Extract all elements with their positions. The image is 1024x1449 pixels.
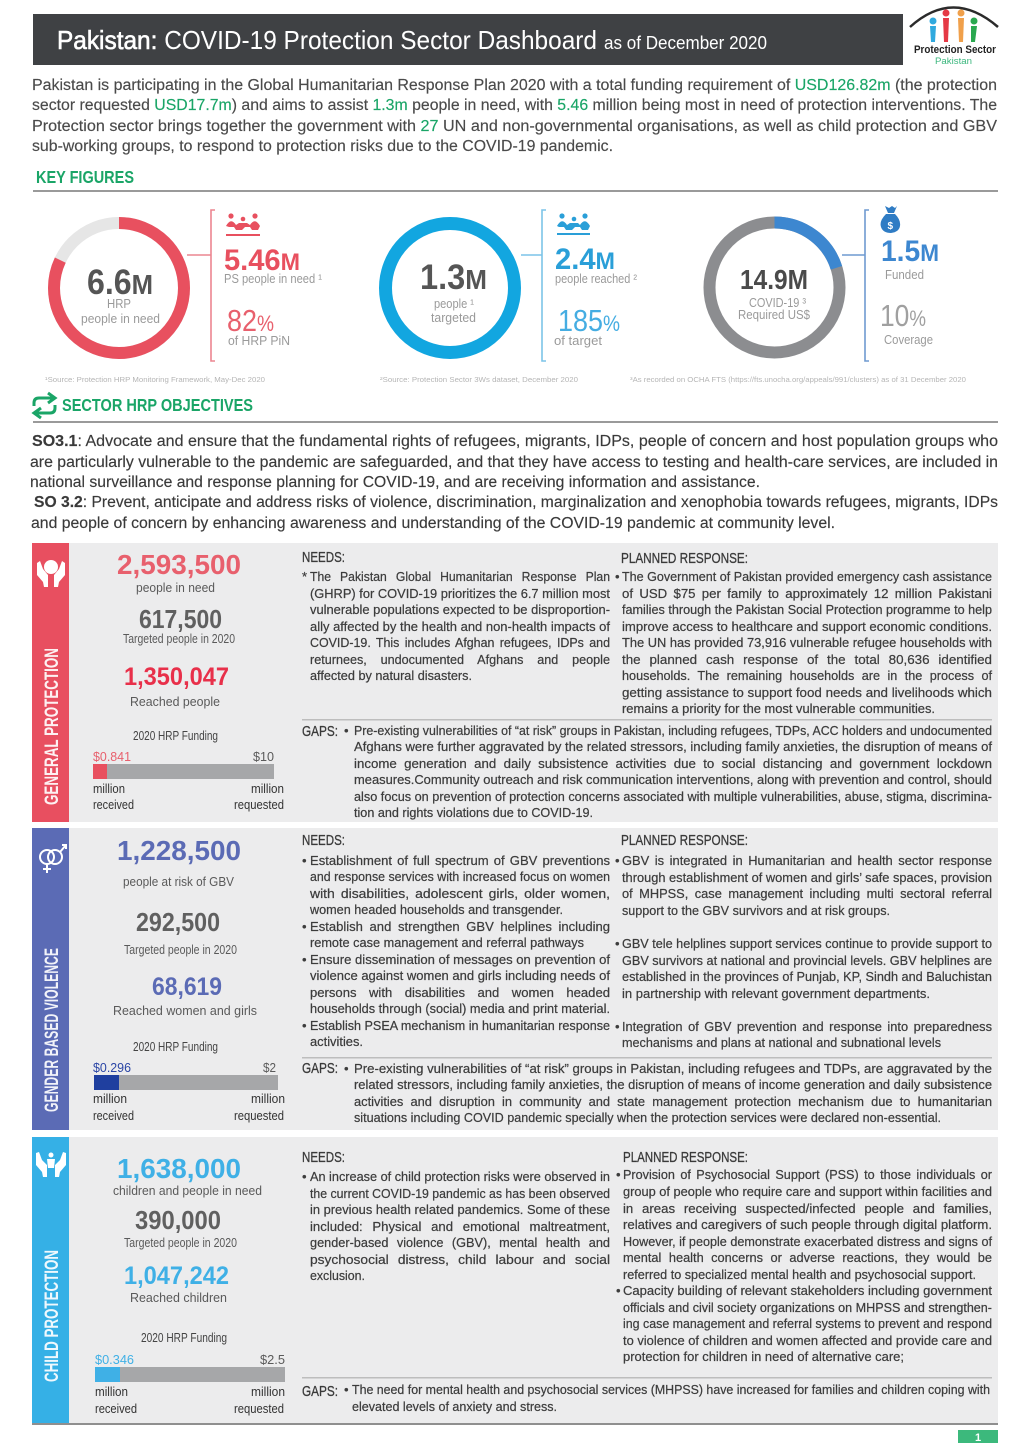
label: Funded — [885, 268, 924, 282]
gaps: The need for mental health and psychosocial services (MHPSS) have increased for families and children coping with — [352, 1382, 990, 1397]
icon: people — [557, 213, 590, 235]
needs: included: Physical and emotional maltreatment, — [310, 1219, 610, 1234]
planned response: GBV survivors at national and provincial levels. GBV helplines are — [622, 953, 992, 968]
gaps: • — [344, 1061, 349, 1076]
panel: gender based violence: people at risk of GBV — [123, 875, 235, 889]
donut: HRP people in need: HRP — [107, 297, 131, 311]
label: of target — [554, 334, 603, 348]
needs: Establishment of full spectrum of GBV preventions — [310, 853, 610, 868]
donut: people targeted: targeted — [431, 311, 476, 325]
planned response: ing case management and referral systems to prevent and respond — [623, 1316, 992, 1331]
funding bar: million — [251, 1385, 285, 1399]
needs: households through (social) media and print material. — [310, 1001, 610, 1016]
needs: • — [302, 853, 307, 868]
objectives text: SO 3.2: Prevent, anticipate and address risks of violence, discrimination, marginalization and xenophobia towards refugees, migrants, IDPs — [34, 494, 998, 511]
gaps: Pre-existing vulnerabilities of “at risk” groups in Pakistan, including refugees, TDPs, ACC holders and undocumented — [354, 723, 992, 738]
icon: money bag: $ — [888, 221, 894, 232]
needs: exclusion. — [310, 1268, 365, 1283]
stat: children in need: 1,638,000 — [117, 1153, 241, 1184]
planned response: • — [616, 1283, 621, 1298]
needs — [302, 549, 610, 683]
label: of HRP PiN — [228, 334, 290, 348]
objectives text: and people of concern by enhancing awareness and understanding of the COVID-19 pandemic at community level. — [31, 515, 835, 532]
sector title: GENERAL PROTECTION — [42, 648, 63, 805]
gaps: activities and disruption in community and state management protection mechanism due to humanitarian — [354, 1094, 992, 1109]
panel: general protection — [32, 543, 998, 822]
funding bar: million — [251, 782, 284, 796]
objectives text: are particularly vulnerable to the pandemic are safeguarded, and that they have access to testing and health-care services, are included in — [30, 454, 998, 471]
planned response: mental health concerns or adverse reactions, they would be — [623, 1250, 992, 1265]
planned response: The Government of Pakistan provided emergency cash assistance — [622, 569, 992, 584]
intro text: Protection sector brings together the government with 27 UN and non-governmental organisations, as well as child protection and GBV — [32, 118, 998, 135]
planned response — [616, 1149, 993, 1364]
planned response: referred to specialized mental health and psychosocial support. — [623, 1267, 976, 1282]
planned response: • — [615, 936, 620, 951]
funding bar — [93, 1040, 285, 1123]
panel: gender based violence: Targeted people in 2020 — [124, 943, 237, 957]
needs: The Pakistan Global Humanitarian Response Plan — [310, 569, 610, 584]
needs: ally affected by the health and non-health impacts of — [310, 619, 610, 634]
needs: women headed households and transgender. — [309, 902, 563, 917]
intro text: sector requested USD17.7m) and aims to assist 1.3m people in need, with 5.46 million being most in need of protection interventions. The — [32, 97, 997, 114]
stat: reached: 1,047,242 — [124, 1262, 229, 1290]
funding bar: million — [93, 1092, 127, 1106]
needs: Establish PSEA mechanism in humanitarian response — [310, 1018, 610, 1033]
icon: hands holding child — [36, 1152, 66, 1177]
header — [33, 14, 903, 65]
key figure: people targeted — [380, 210, 637, 384]
stat: 82%: 82% — [227, 303, 274, 338]
donut: required funding: COVID-19 ³ — [749, 296, 806, 310]
planned response: Capacity building of relevant stakeholders including government — [623, 1283, 992, 1298]
donut: required funding: 14.9M — [740, 264, 808, 295]
stat: targeted: 617,500 — [139, 604, 222, 634]
gaps — [302, 723, 992, 820]
title: Pakistan: COVID-19 Protection Sector Dashboard — [57, 25, 597, 55]
label: PS people in need ¹ — [224, 272, 322, 286]
needs: NEEDS: — [302, 1149, 345, 1166]
label: Coverage — [884, 333, 933, 347]
needs: • — [302, 1018, 307, 1033]
icon: hands holding person — [37, 560, 65, 587]
icon: arrows — [34, 393, 55, 418]
planned response: The UN has provided 73,916 vulnerable refugee households with — [622, 635, 992, 650]
donut: HRP people in need: people in need — [81, 312, 160, 326]
stat: 2.4M: 2.4M — [555, 243, 615, 276]
panel: gender based violence — [32, 828, 998, 1130]
gaps: Pre-existing vulnerabilities of “at risk” groups in Pakistan, including refugees and TDPs, are aggravated by the — [354, 1061, 992, 1076]
donut: people targeted — [386, 224, 514, 352]
planned response: • — [615, 853, 620, 868]
objectives text: SO3.1: Advocate and ensure that the fundamental rights of refugees, migrants, IDPs, people of concern and host population groups who — [32, 433, 998, 450]
gaps: tion and rights violations due to COVID-19. — [354, 805, 593, 820]
planned response: of USD $75 per family to approximately 12 million Pakistani — [622, 586, 992, 601]
donut: people targeted: 1.3M — [420, 258, 487, 297]
needs: Establish and strengthen GBV helplines including — [310, 919, 610, 934]
stat: people in need: 2,593,500 — [117, 549, 241, 580]
planned response: GBV is integrated in Humanitarian and health sector response — [622, 853, 992, 868]
source: ³As recorded on OCHA FTS (https://fts.unocha.org/appeals/991/clusters) as of 31 December 2020 — [630, 375, 966, 384]
stat: targeted: 390,000 — [135, 1205, 221, 1235]
key figure: funding — [630, 206, 966, 384]
gaps: income generation and daily subsistence activities due to social distancing and government lockdown — [354, 756, 992, 771]
panel: general protection: people in need — [136, 581, 215, 595]
planned response: families through the Pakistan Social Protection programme to help — [622, 602, 992, 617]
intro text: Pakistan is participating in the Global Humanitarian Response Plan 2020 with a total funding requirement of USD126.82m (the protection — [32, 77, 997, 94]
objectives text — [30, 433, 998, 532]
planned response: Provision of Psychosocial Support (PSS) to those individuals or — [623, 1167, 993, 1182]
donut: HRP people in need: 6.6M — [87, 263, 153, 302]
funding bar: received — [93, 1109, 134, 1123]
funding bar: million — [95, 1385, 128, 1399]
needs: psychosocial distress, child labour and social — [310, 1252, 610, 1267]
planned response: to violence of children and women affected and provide care and — [623, 1333, 992, 1348]
logo: Protection Sector — [914, 44, 997, 56]
needs: in previous health related pandemics. Some of these — [310, 1202, 610, 1217]
gaps — [302, 1060, 992, 1125]
needs: gender-based violence (GBV), mental health and — [310, 1235, 610, 1250]
planned response: officials and civil society organizations on MHPSS and strengthen- — [623, 1300, 992, 1315]
key figures heading: KEY FIGURES — [36, 167, 134, 187]
planned response: mechanisms and plans at national and subnational levels — [622, 1035, 941, 1050]
objectives heading — [33, 393, 998, 423]
funding bar: 2020 HRP Funding — [133, 1040, 218, 1054]
planned response: group of people who require care and support within facilities and — [623, 1184, 992, 1199]
panel: general protection: Reached people — [130, 695, 220, 709]
funding bar: 2020 HRP Funding — [141, 1331, 227, 1345]
planned response: relatives and caregivers of such people through digital platform. — [623, 1217, 992, 1232]
funding bar — [95, 1331, 285, 1416]
stat: targeted: 292,500 — [136, 907, 220, 937]
donut: required funding: Required US$ — [738, 308, 810, 322]
gaps: Afghans were further aggravated by the related stressors, including family anxieties, the disruption of means of — [354, 739, 992, 754]
planned response: PLANNED RESPONSE: — [621, 832, 748, 849]
gaps: GAPS: — [302, 1383, 338, 1400]
planned response: getting assistance to support food needs and livelihoods which — [622, 685, 992, 700]
planned response — [615, 550, 992, 716]
icon: money bag — [881, 206, 900, 233]
needs: vulnerable populations expected to be disproportion- — [310, 602, 610, 617]
gaps — [302, 1382, 990, 1414]
needs: NEEDS: — [302, 832, 345, 849]
planned response: PLANNED RESPONSE: — [623, 1149, 748, 1166]
needs — [302, 832, 610, 1049]
planned response: • — [615, 569, 620, 584]
funding bar: million — [251, 1092, 285, 1106]
funding bar: requested — [234, 1109, 284, 1123]
panel: child protection: Reached children — [130, 1291, 227, 1305]
needs: affected by natural disasters. — [310, 668, 472, 683]
sector title: GENDER BASED VIOLENCE — [42, 948, 63, 1112]
planned response — [615, 832, 992, 1050]
funding bar: million — [93, 782, 125, 796]
logo — [910, 8, 998, 66]
stat: reached: 1,350,047 — [124, 663, 229, 691]
title date: as of December 2020 — [604, 33, 767, 53]
funding bar: $2 — [263, 1061, 276, 1075]
icon: gender symbols — [40, 845, 66, 873]
gaps: elevated levels of anxiety and stress. — [352, 1399, 557, 1414]
planned response: However, if people demonstrate exacerbated distress and signs of — [623, 1234, 992, 1249]
needs: activities. — [310, 1034, 363, 1049]
stat: 1.5M: 1.5M — [881, 235, 939, 268]
funding bar: requested — [234, 798, 284, 812]
planned response: protection for children in need of alternative care; — [623, 1349, 904, 1364]
planned response: of MHPSS, case management including multi sectoral referral — [622, 886, 992, 901]
planned response: • — [616, 1167, 621, 1182]
needs: returnees, undocumented Afghans and people — [310, 652, 610, 667]
needs: (GHRP) for COVID-19 prioritizes the 6.7 million most — [310, 586, 610, 601]
needs: with disabilities, adolescent girls, older women, — [309, 886, 610, 901]
planned response: improve access to healthcare and support economic conditions. — [622, 619, 992, 634]
gaps: also focus on prevention of protection concerns associated with multiple vulnerabilities, abuse, stigma, discrimina- — [354, 789, 992, 804]
panel: child protection: Targeted people in 2020 — [124, 1236, 237, 1250]
key figure: people in need — [45, 210, 322, 384]
planned response: support to the GBV survivors and at risk groups. — [622, 903, 890, 918]
sector title: CHILD PROTECTION — [42, 1250, 63, 1382]
panel: child protection — [32, 1137, 998, 1425]
needs: • — [302, 1169, 307, 1184]
planned response: Integration of GBV prevention and response into preparedness — [622, 1019, 992, 1034]
planned response: PLANNED RESPONSE: — [621, 550, 748, 567]
icon: people — [226, 213, 260, 236]
planned response: GBV tele helplines support services continue to provide support to — [622, 936, 992, 951]
needs: violence against women and girls including needs of — [310, 968, 610, 983]
objectives heading: SECTOR HRP OBJECTIVES — [62, 395, 253, 415]
gaps: situations including COVID pandemic specially when the protection services were declared non-essential. — [354, 1110, 941, 1125]
funding bar: received — [93, 798, 134, 812]
needs: and response services with increased focus on women — [310, 869, 610, 884]
panel: general protection: Targeted people in 2020 — [123, 632, 235, 646]
donut: HRP people in need — [54, 223, 184, 353]
logo: Pakistan — [935, 56, 972, 66]
label: people reached ² — [555, 272, 637, 286]
funding bar: $0.296 — [93, 1061, 131, 1075]
needs: persons with disabilities and women headed — [310, 985, 610, 1000]
panel: child protection: children and people in need — [113, 1184, 262, 1198]
funding bar: requested — [234, 1402, 284, 1416]
gaps: • — [344, 723, 349, 738]
gaps: related stressors, including family anxieties, the disruption of means of income generation and daily subsistence — [354, 1077, 992, 1092]
donut: required funding — [710, 222, 840, 352]
planned response: in partnership with relevant government departments. — [622, 986, 930, 1001]
planned response: households. The remaining households are in the process of — [622, 668, 992, 683]
planned response: in areas receiving suspected/infected people and families, — [623, 1201, 992, 1216]
planned response: the planned cash response of the total 80,636 identified — [622, 652, 992, 667]
needs: • — [302, 952, 307, 967]
needs: An increase of child protection risks were observed in — [310, 1169, 610, 1184]
stat: 185%: 185% — [558, 303, 620, 338]
stat: 5.46M: 5.46M — [224, 244, 300, 277]
page number: 1 — [975, 1432, 981, 1444]
source: ¹Source: Protection HRP Monitoring Framework, May-Dec 2020 — [45, 375, 265, 384]
funding bar: $0.346 — [95, 1353, 134, 1367]
gaps: measures.Community outreach and risk communication interventions, along with prevention and control, should — [354, 772, 992, 787]
stat: 10%: 10% — [880, 298, 926, 333]
gaps: • — [344, 1382, 349, 1397]
funding bar: $2.5 — [260, 1353, 285, 1367]
needs: Ensure dissemination of messages on prevention of — [310, 952, 610, 967]
needs: • — [302, 919, 307, 934]
needs: remote case management and referral pathways — [310, 935, 584, 950]
needs: NEEDS: — [302, 549, 345, 566]
page number — [958, 1430, 998, 1444]
source: ²Source: Protection Sector 3Ws dataset, December 2020 — [380, 375, 578, 384]
planned response: remains a priority for the most vulnerable communities. — [622, 701, 935, 716]
funding bar: received — [95, 1402, 137, 1416]
funding bar: 2020 HRP Funding — [133, 729, 218, 743]
planned response: • — [615, 1019, 620, 1034]
needs: the current COVID-19 pandemic as has been observed — [310, 1186, 610, 1201]
planned response: established in the provinces of Punjab, KP, Sindh and Baluchistan — [622, 969, 992, 984]
planned response: through establishment of women and girls’ safe spaces, provision — [622, 870, 992, 885]
funding bar: $0.841 — [93, 750, 131, 764]
funding bar — [93, 729, 284, 812]
intro text — [32, 77, 998, 155]
needs: COVID-19. This includes Afghan refugees, IDPs and — [310, 635, 610, 650]
stat: people at risk: 1,228,500 — [117, 835, 241, 866]
gaps: GAPS: — [302, 1060, 338, 1077]
objectives text: national surveillance and response planning for COVID-19, and are receiving information and assistance. — [30, 474, 760, 491]
needs: * — [302, 569, 307, 584]
donut: people targeted: people ¹ — [434, 297, 474, 311]
panel: gender based violence: Reached women and girls — [113, 1004, 257, 1018]
funding bar: $10 — [253, 750, 274, 764]
intro text: sub-working groups, to respond to protection risks due to the COVID-19 pandemic. — [32, 138, 613, 155]
gaps: GAPS: — [302, 723, 338, 740]
needs — [302, 1149, 610, 1283]
stat: reached: 68,619 — [152, 973, 222, 1001]
